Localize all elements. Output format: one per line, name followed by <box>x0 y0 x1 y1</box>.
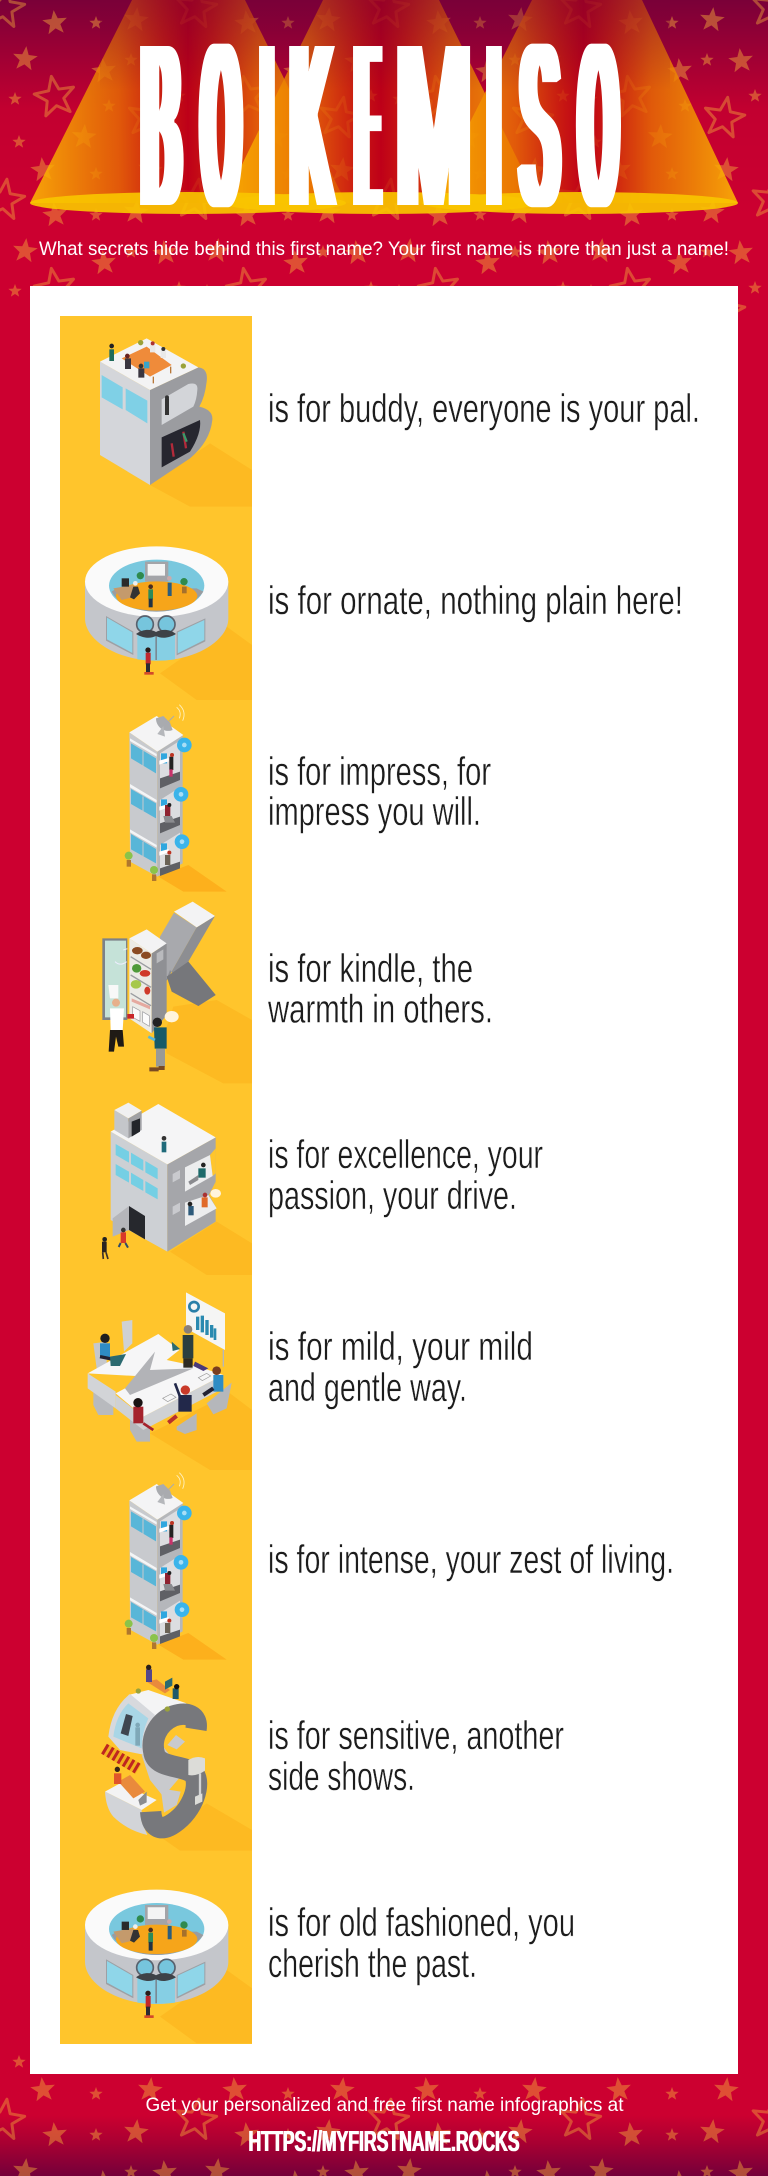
text: I lines <box>268 750 491 834</box>
text: S lines: is for sensitive, another <box>268 1714 564 1758</box>
title: S <box>521 0 558 256</box>
text: S lines: side shows. <box>268 1755 415 1799</box>
text: S lines <box>268 1714 564 1799</box>
text: O lines <box>268 1901 575 1986</box>
icon: letter I tower <box>125 705 227 892</box>
icon: letter B building <box>100 338 252 507</box>
text: M lines <box>268 1325 533 1410</box>
icon: letter S building <box>104 1665 252 1851</box>
text: E lines <box>268 1133 543 1218</box>
background: bottom stars <box>0 2050 768 2176</box>
text: M lines: and gentle way. <box>268 1366 467 1410</box>
text: O lines: cherish the past. <box>268 1942 477 1986</box>
subtitle: What secrets hide behind this first name? Your first name is more than just a name! <box>39 238 729 260</box>
text: E lines: passion, your drive. <box>268 1174 517 1218</box>
background: top stars <box>0 0 768 322</box>
title: M <box>397 0 470 256</box>
text: O lines: is for old fashioned, you <box>268 1901 575 1945</box>
icon: letter I tower repeat <box>125 1473 227 1660</box>
text: K lines <box>267 947 493 1032</box>
text: K lines: is for kindle, the <box>268 947 473 991</box>
icon: letter E building <box>102 1103 252 1275</box>
text: E lines: is for excellence, your <box>268 1133 543 1177</box>
icon: letter O building <box>85 546 252 700</box>
text: M lines: is for mild, your mild <box>268 1325 533 1369</box>
title: B <box>142 0 180 256</box>
text: I lines: is for impress, for <box>268 750 491 794</box>
title: O <box>203 0 239 256</box>
text: O <box>581 0 616 256</box>
text: I lines: impress you will. <box>268 790 481 834</box>
footer text: Get your personalized and free first name infographics at <box>146 2094 624 2116</box>
spotlights <box>30 0 738 214</box>
title: K <box>291 0 332 256</box>
yellow illustration column <box>60 316 252 2044</box>
icon: letter O building repeat <box>85 1890 252 2043</box>
icon: letter K fridge <box>102 902 252 1083</box>
title: I <box>491 0 497 256</box>
icon: letter M meeting table <box>88 1292 252 1470</box>
title <box>142 0 616 256</box>
text: K lines: warmth in others. <box>267 988 493 1032</box>
title: I <box>264 0 270 256</box>
footer url: HTTPS://MYFIRSTNAME.ROCKS <box>248 2126 520 2158</box>
title: E <box>358 0 377 256</box>
white panel <box>30 286 738 2074</box>
